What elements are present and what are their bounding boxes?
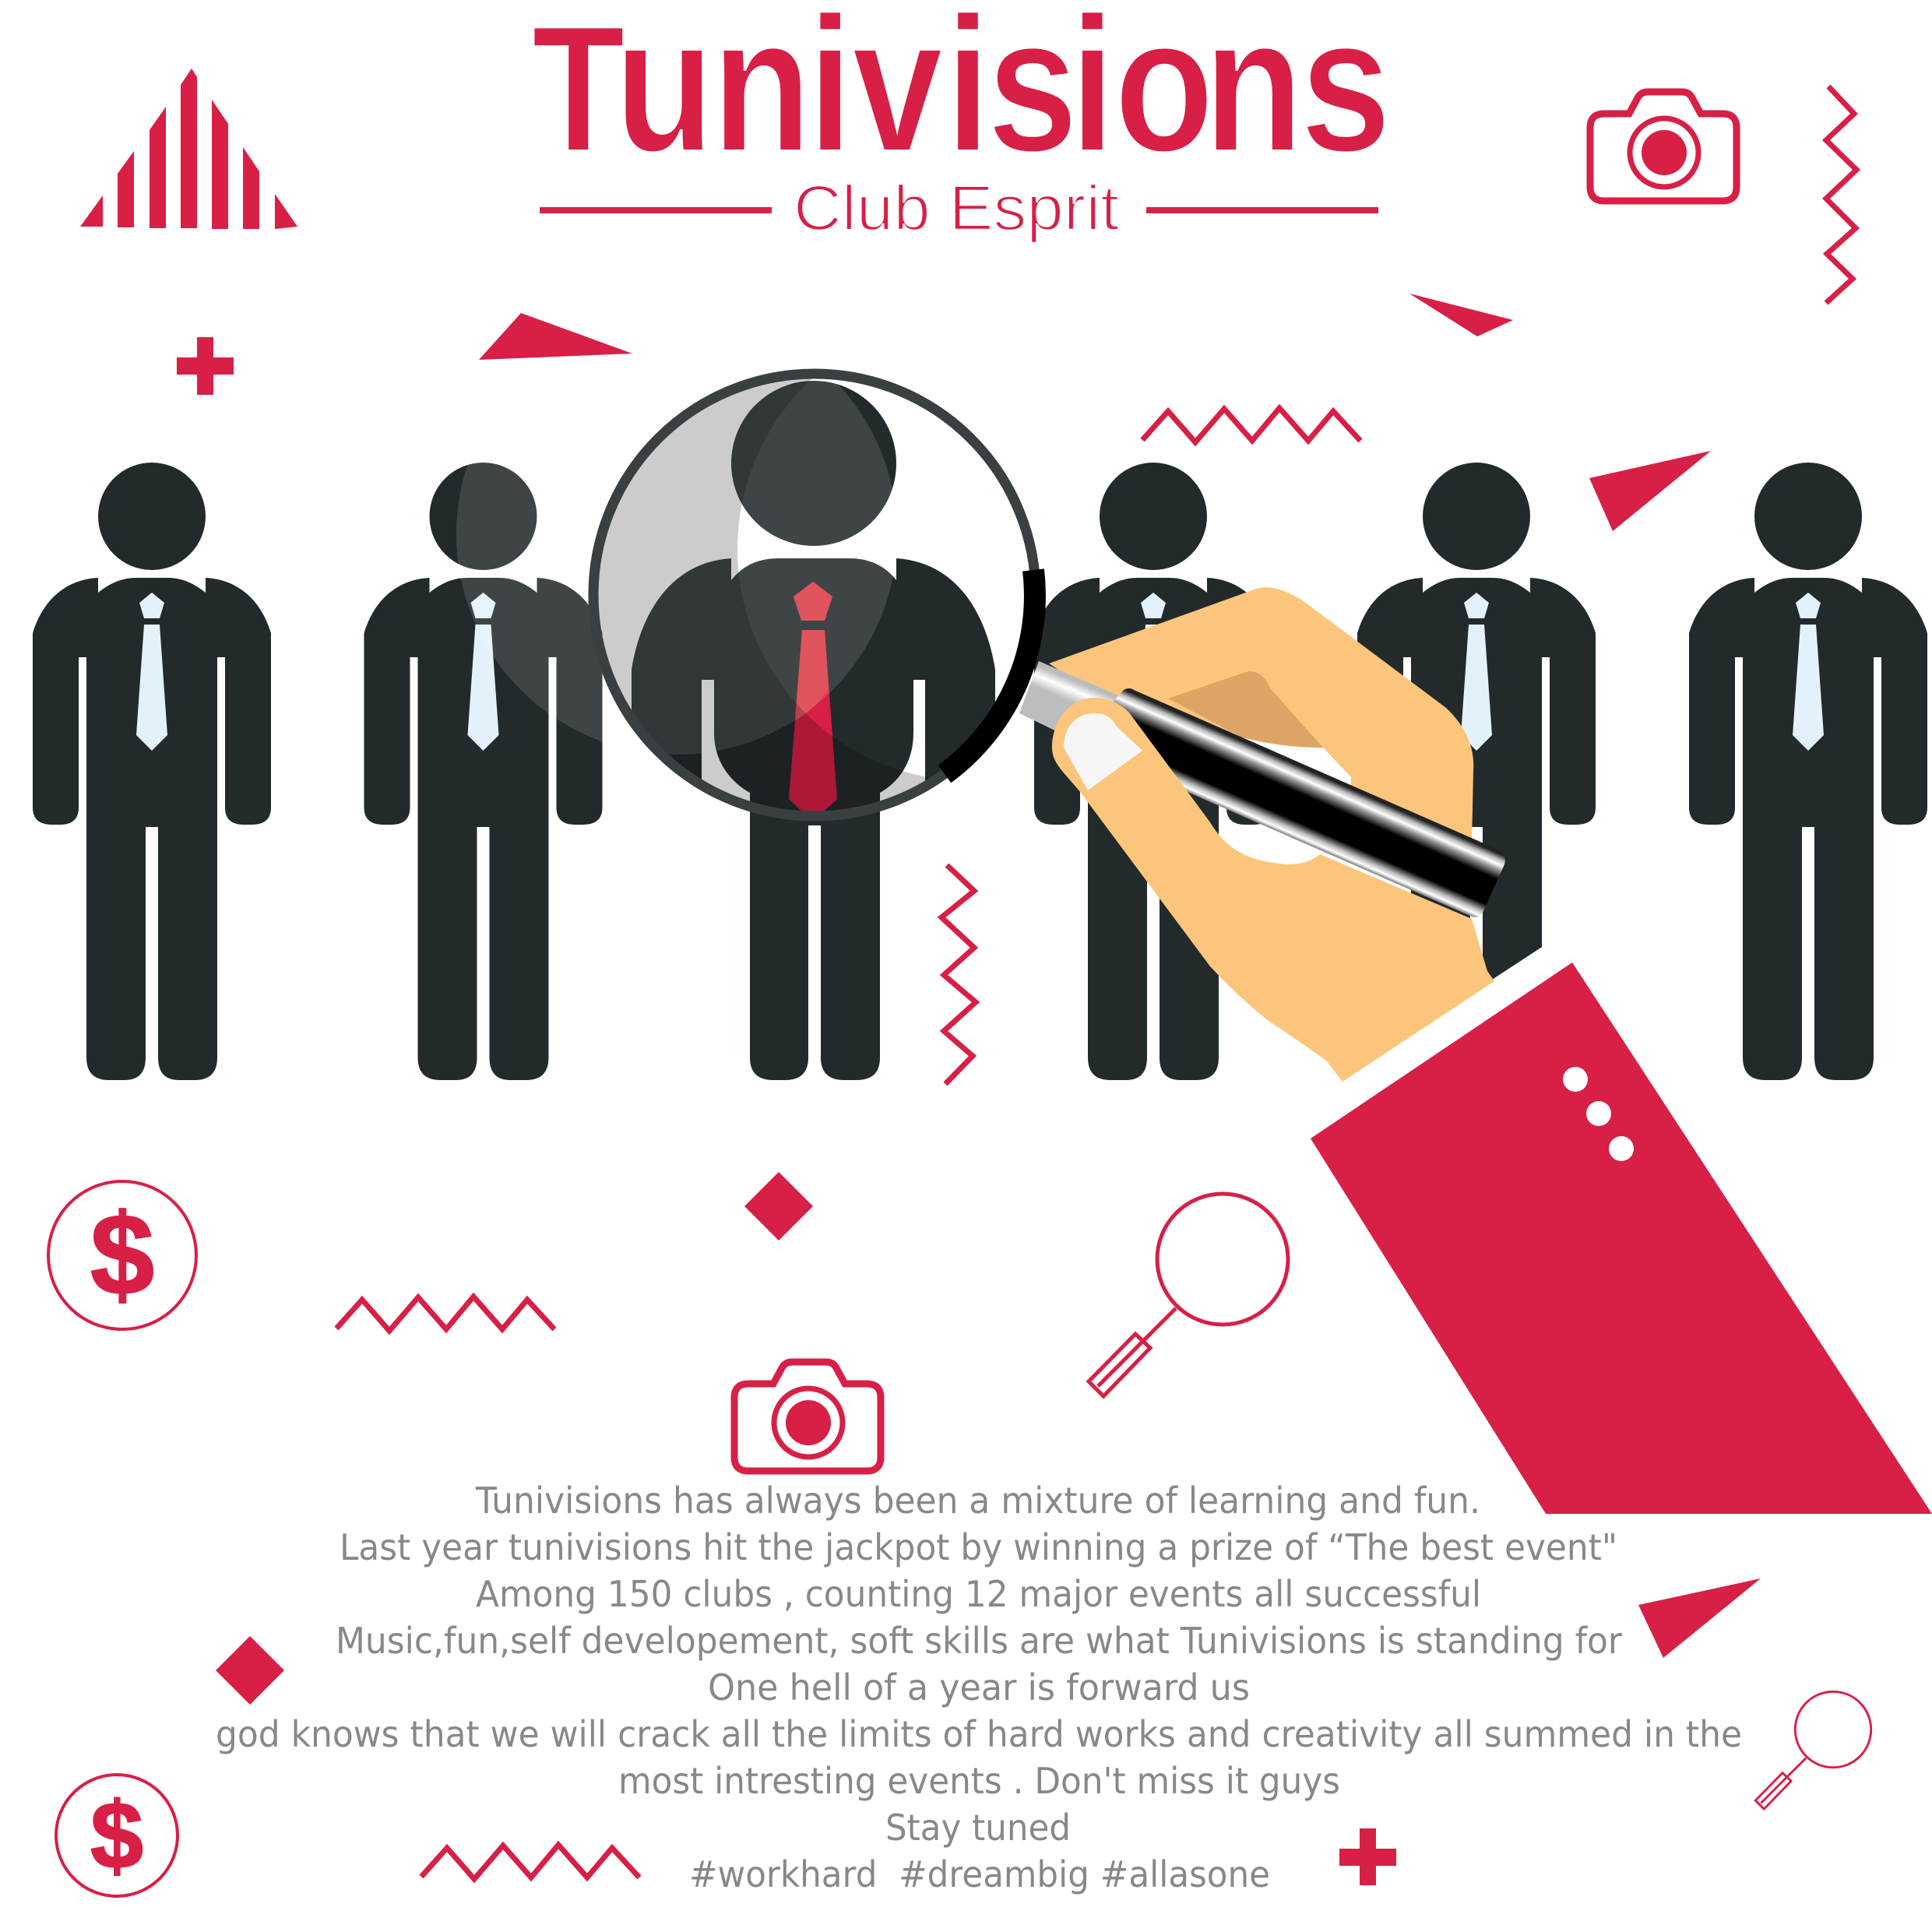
- translucent highlight: [456, 314, 897, 755]
- body text: Among 150 clubs , counting 12 major events all successful: [476, 1573, 1481, 1615]
- body text: Stay tuned: [885, 1807, 1071, 1849]
- person 2: [364, 463, 603, 1080]
- tie lit portion: [794, 582, 832, 720]
- person 4: [1034, 463, 1272, 1080]
- person 6: [1689, 463, 1927, 1080]
- icon: plus top left: [177, 337, 234, 395]
- subtitle rule left: [540, 207, 772, 213]
- icon: magnifier outline large: [1089, 1194, 1288, 1396]
- subtitle: Club Esprit: [794, 173, 1119, 244]
- lens ring: [593, 374, 1036, 816]
- triangle accent A: [479, 313, 632, 360]
- icon: magnifier outline small: [1755, 1691, 1871, 1809]
- magnifier with enlarged person: [456, 314, 1202, 1080]
- diamond left: [216, 1636, 284, 1705]
- triangle accent C: [1589, 451, 1711, 531]
- metal shaft: [1019, 661, 1125, 748]
- red tie: [789, 582, 837, 814]
- body text: [216, 1480, 1742, 1895]
- diamond centre: [744, 1172, 813, 1240]
- body text: Music,fun,self developement, soft skills are what Tunivisions is standing for: [336, 1620, 1622, 1662]
- zigzag above people: [1142, 408, 1360, 442]
- zigzag top right: [1826, 86, 1856, 303]
- body text: One hell of a year is forward us: [708, 1666, 1250, 1709]
- hand shade: [1168, 671, 1323, 748]
- hand upper: [1049, 587, 1473, 880]
- dollar icon upper: [48, 1181, 196, 1329]
- ring black arc: [945, 570, 1035, 774]
- gap between fingers: [1242, 737, 1351, 802]
- zigzag centre vertical: [941, 865, 976, 1084]
- dollar icon lower: $: [90, 1782, 143, 1888]
- dollar icon lower: [56, 1775, 178, 1896]
- body text: Last year tunivisions hit the jackpot by winning a prize of “The best event": [340, 1526, 1617, 1568]
- cuff buttons: [1563, 1067, 1634, 1161]
- triangle accent B: [1409, 294, 1513, 336]
- zigzag bottom: [421, 1845, 639, 1879]
- person 5: [1357, 463, 1596, 1080]
- body text: god knows that we will crack all the limits of hard works and creativity all summed in the: [216, 1713, 1742, 1755]
- zigzag lower left: [336, 1297, 554, 1331]
- icon: plus bottom: [1339, 1828, 1396, 1885]
- icon: camera lower: [734, 1362, 881, 1471]
- white band around cuff: [1310, 937, 1932, 1514]
- body text: most intresting events . Don't miss it guys: [618, 1760, 1340, 1802]
- person 1: [33, 463, 271, 1080]
- dollar icon upper: $: [90, 1191, 154, 1319]
- subtitle rule right: [1146, 207, 1378, 213]
- sleeve cuff: [1311, 962, 1932, 1514]
- hand lower and thumb: [1052, 698, 1494, 1082]
- pen handle: [1114, 688, 1505, 917]
- person 3 legs: [750, 779, 880, 1080]
- body text: #workhard #dreambig #allasone: [689, 1853, 1270, 1895]
- icon: camera top right: [1590, 92, 1737, 201]
- hand holding magnifier: [1019, 587, 1505, 1082]
- body text: Tunivisions has always been a mixture of learning and fun.: [475, 1480, 1480, 1522]
- lens crescent shadow: [598, 378, 930, 811]
- thumbnail: [1064, 713, 1142, 790]
- triangle accent D: [1638, 1578, 1761, 1658]
- enlarged person: [632, 381, 995, 793]
- icon: striped triangle: [80, 69, 297, 229]
